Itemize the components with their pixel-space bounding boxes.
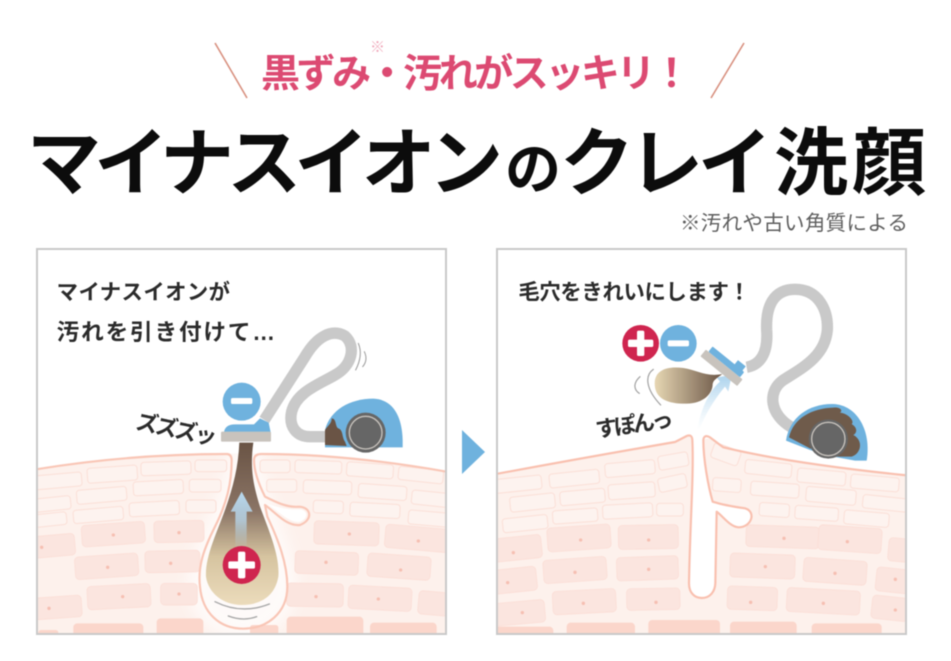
cell nuclei: [40, 531, 420, 610]
skin base: [30, 453, 453, 640]
panel border: [497, 249, 906, 634]
vacuum hose: [264, 333, 351, 437]
icon: plus charge: [223, 546, 261, 584]
cell nuclei: [506, 537, 897, 614]
gland interior: [272, 506, 306, 522]
icon: plus charge: [622, 325, 659, 362]
vacuum nozzle: [700, 346, 746, 386]
upper skin cells: [493, 442, 908, 533]
panel: before, minus ions attract dirt: [29, 249, 453, 640]
handwritten caption line 2: 汚れを引き付けて…: [57, 319, 275, 345]
main title: マイナスイオン: [27, 122, 503, 205]
bottom skin cells: [38, 616, 437, 634]
icon: minus charge: [660, 325, 697, 362]
footnote: ※汚れや古い角質による: [680, 212, 908, 235]
skin and pore outline: [36, 454, 447, 629]
vacuum nozzle: [221, 418, 271, 442]
skin and pore outline: [496, 435, 907, 598]
main title: クレイ: [560, 122, 772, 205]
main title: [27, 122, 926, 205]
vibration lines under dirt: [215, 602, 269, 619]
vibration marks: [356, 343, 366, 370]
sound effect: suponts: すぽんっ: [594, 407, 675, 442]
main title: の: [505, 138, 561, 201]
vacuum body: [325, 399, 403, 453]
icon: minus charge: [223, 383, 261, 421]
header tagline with slashes: 黒ずみ・汚れがスッキリ！: [261, 53, 691, 96]
arrow between panels: [462, 430, 485, 474]
light glow around pore: [196, 453, 288, 630]
upper skin cells: [33, 460, 451, 528]
empty pore interior: [689, 437, 751, 598]
motion lines: [635, 369, 661, 405]
removed dirt blob: [655, 368, 722, 404]
handwritten caption line 1: マイナスイオンが: [57, 279, 230, 304]
skin base: [490, 437, 913, 640]
upward arrow: [231, 492, 253, 550]
lower skin cells: [29, 520, 451, 620]
dirt in pore: [206, 443, 279, 605]
header tagline with slashes: [215, 39, 744, 98]
header tagline with slashes: ※: [370, 39, 385, 56]
lower skin cells: [489, 524, 913, 627]
handwritten caption: 毛穴をきれいにします！: [518, 280, 750, 304]
sound effect: zuzuzu: ズズズッ: [134, 409, 219, 450]
bottom skin cells: [498, 620, 882, 634]
panel: after, pore cleaned: [489, 249, 913, 640]
main title: 洗顔: [774, 122, 926, 205]
vacuum hose: [747, 289, 827, 427]
vacuum body: [786, 404, 868, 461]
panel border: [37, 249, 446, 634]
upward swoosh: [700, 376, 731, 422]
